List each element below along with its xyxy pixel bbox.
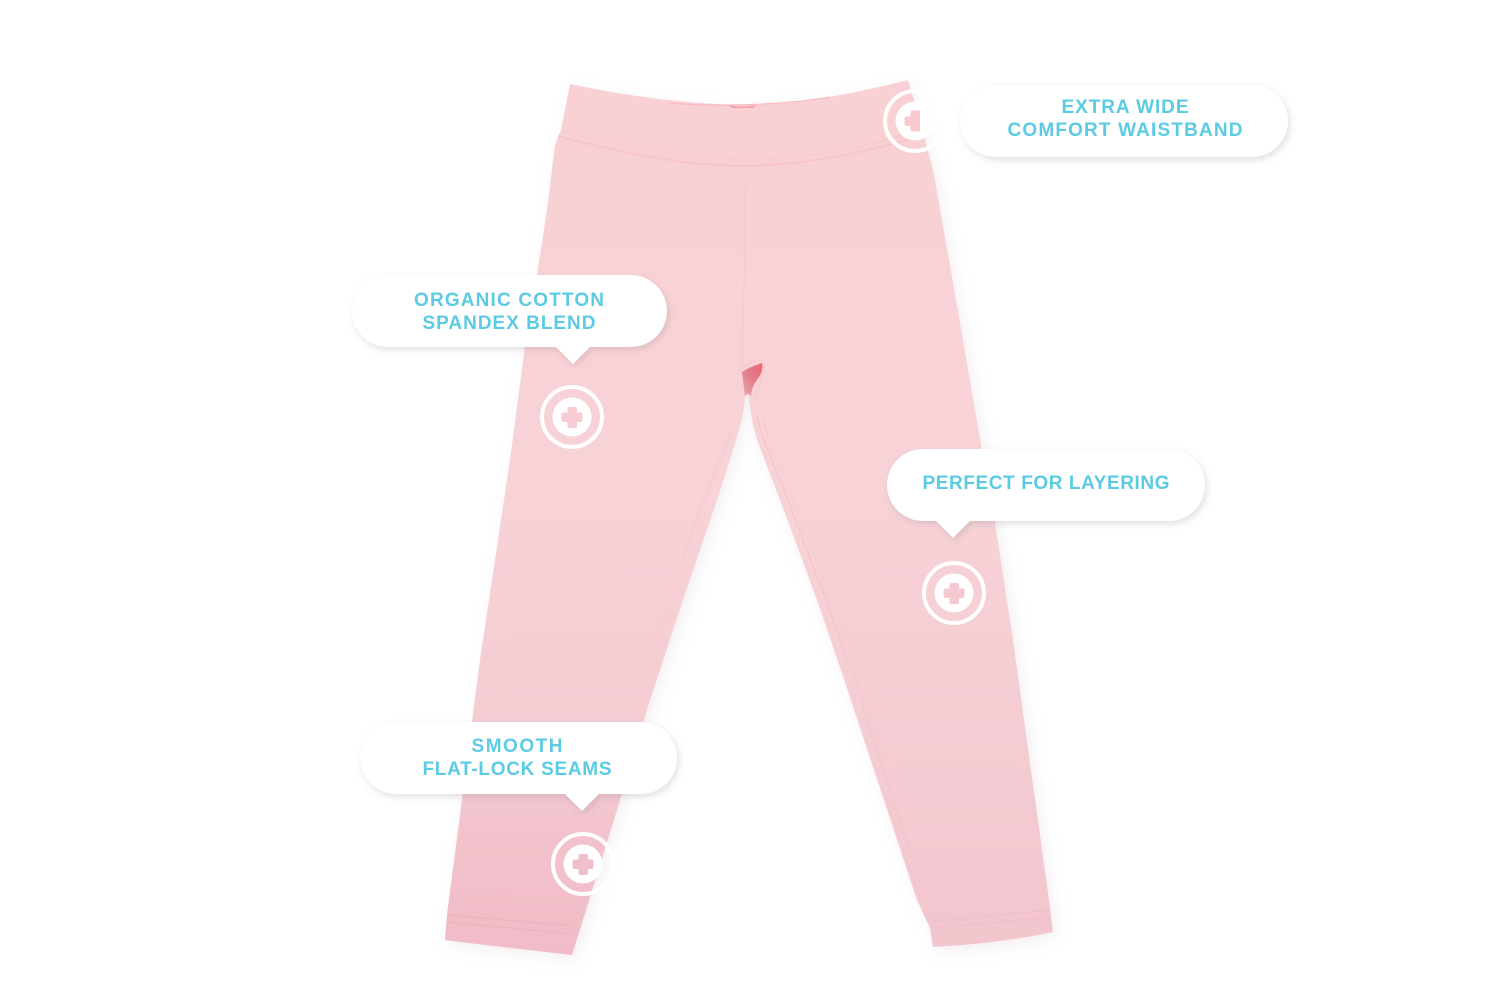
- waistband back tag: [728, 105, 757, 108]
- marker: right leg: [924, 563, 984, 623]
- callout: extra wide comfort waistband: EXTRA WIDE: [1062, 97, 1188, 118]
- callout: smooth flat-lock seams: FLAT-LOCK SEAMS: [422, 759, 612, 780]
- left inner leg seam: [646, 432, 731, 680]
- marker: thigh: [542, 387, 602, 447]
- marker: waistband: [883, 89, 930, 153]
- centre front seam: [741, 166, 745, 365]
- callout: organic cotton spandex blend: ORGANIC COTTON: [414, 290, 604, 311]
- callout: smooth flat-lock seams: [360, 722, 677, 811]
- callout: organic cotton spandex blend: [352, 275, 667, 364]
- waistband seam: [558, 132, 930, 166]
- marker: ankle: [553, 834, 613, 894]
- left cuff shading: [445, 720, 645, 955]
- left hem stitching: [447, 915, 574, 934]
- right inner leg seam: [757, 415, 925, 900]
- crotch gusset: [742, 363, 762, 397]
- infographic canvas: [352, 80, 1292, 958]
- waistband inner edge: [670, 97, 830, 105]
- leggings body: [445, 80, 1053, 955]
- callout: organic cotton spandex blend: SPANDEX BLEND: [422, 313, 596, 334]
- callout: smooth flat-lock seams: SMOOTH: [472, 736, 562, 757]
- callout: perfect for layering: PERFECT FOR LAYERING: [922, 473, 1170, 494]
- right hem stitching: [933, 910, 1050, 928]
- callout: extra wide comfort waistband: COMFORT WAISTBAND: [1008, 120, 1242, 141]
- callout: perfect for layering: [887, 449, 1205, 538]
- callout: extra wide comfort waistband: [960, 85, 1288, 157]
- leggings garment: [445, 80, 1053, 955]
- crotch fold: [740, 360, 764, 400]
